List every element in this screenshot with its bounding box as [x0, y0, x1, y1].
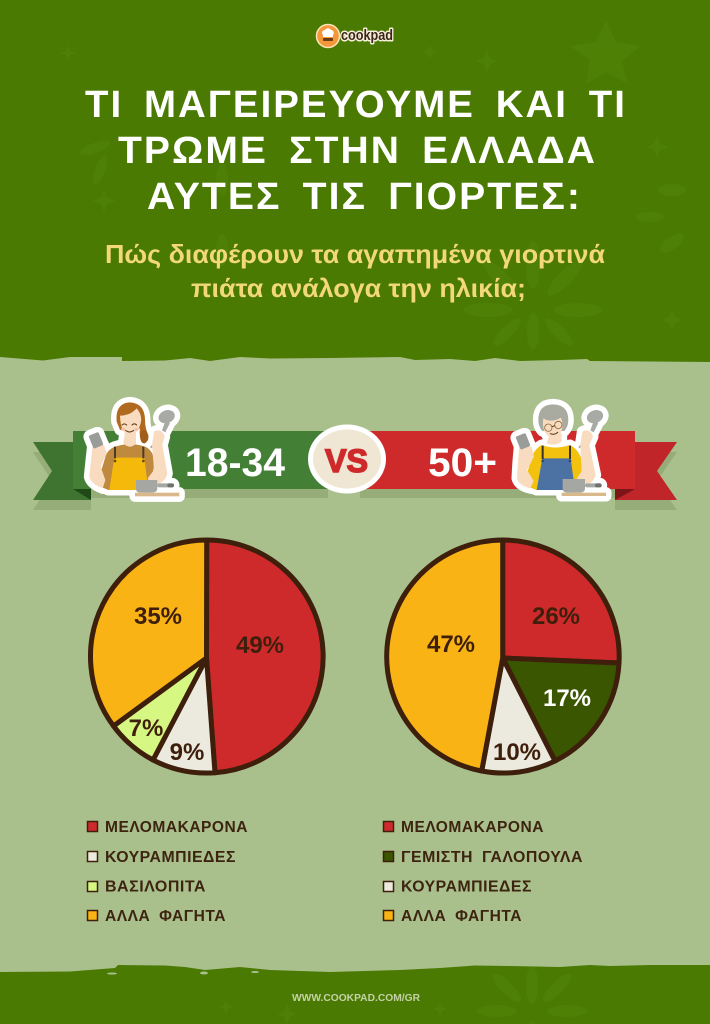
- labels: 10%: [493, 739, 541, 766]
- legend: 18-34: ΜΕΛΟΜΑΚΑΡΟΝΑ: [105, 819, 248, 836]
- labels: [427, 603, 591, 766]
- slice: 9%: [153, 658, 215, 773]
- ribbon: 50+: [360, 431, 677, 510]
- labels: 35%: [134, 603, 182, 630]
- slice: 7%: [114, 658, 206, 760]
- labels: 7%: [129, 715, 163, 742]
- vs badge: [308, 424, 386, 494]
- legend: 18-34: ΒΑΣΙΛΟΠΙΤΑ: [105, 878, 206, 896]
- labels: 26%: [532, 603, 580, 630]
- labels: 49%: [236, 632, 284, 659]
- legend: 18-34: ΚΟΥΡΑΜΠΙΕΔΕΣ: [105, 849, 236, 866]
- slice: 47%: [387, 540, 503, 771]
- pie chart: 18-34: [90, 540, 323, 773]
- title: ΤΙ ΜΑΓΕΙΡΕΥΟΥΜΕ ΚΑΙ ΤΙ: [85, 84, 627, 126]
- subtitle: [105, 239, 605, 303]
- legend: 50+: ΑΛΛΑ ΦΑΓΗΤΑ: [401, 908, 522, 925]
- labels: 17%: [543, 685, 591, 712]
- legend: 50+: [384, 819, 583, 925]
- label: 18-34: 18-34: [185, 441, 286, 485]
- slice: 35%: [90, 540, 207, 726]
- icon: older woman cook: [515, 404, 606, 496]
- legend: 50+: ΜΕΛΟΜΑΚΑΡΟΝΑ: [401, 819, 544, 836]
- title: ΤΡΩΜΕ ΣΤΗΝ ΕΛΛΑΔΑ: [118, 130, 597, 172]
- legend: 18-34: [88, 819, 248, 925]
- header band: [0, 0, 710, 362]
- slice: 10%: [482, 658, 555, 773]
- logo: cookpad: [316, 24, 393, 48]
- ribbon: 18-34: [33, 431, 333, 510]
- logo: cookpad: cookpad: [341, 28, 393, 44]
- labels: 9%: [170, 739, 204, 766]
- slice: 26%: [503, 540, 619, 663]
- legend: 50+: ΓΕΜΙΣΤΗ ΓΑΛΟΠΟΥΛΑ: [401, 849, 583, 866]
- legend: 18-34: ΑΛΛΑ ΦΑΓΗΤΑ: [105, 908, 226, 925]
- label: 50+: 50+: [428, 441, 497, 485]
- legend: 50+: ΚΟΥΡΑΜΠΙΕΔΕΣ: [401, 878, 532, 896]
- pie chart: 50+: [387, 540, 619, 773]
- footer url: WWW.COOKPAD.COM/GR: [292, 992, 420, 1004]
- labels: [129, 603, 284, 766]
- footer band: [0, 965, 710, 1024]
- vs badge: VS: [325, 443, 368, 479]
- subtitle: πιάτα ανάλογα την ηλικία;: [191, 273, 526, 303]
- labels: 47%: [427, 631, 475, 658]
- slice: 17%: [503, 658, 619, 761]
- title: ΑΥΤΕΣ ΤΙΣ ΓΙΟΡΤΕΣ:: [147, 176, 582, 218]
- slice: 49%: [206, 540, 323, 773]
- title: [85, 84, 627, 218]
- subtitle: Πώς διαφέρουν τα αγαπημένα γιορτινά: [105, 239, 605, 269]
- icon: young woman cook: [88, 402, 179, 496]
